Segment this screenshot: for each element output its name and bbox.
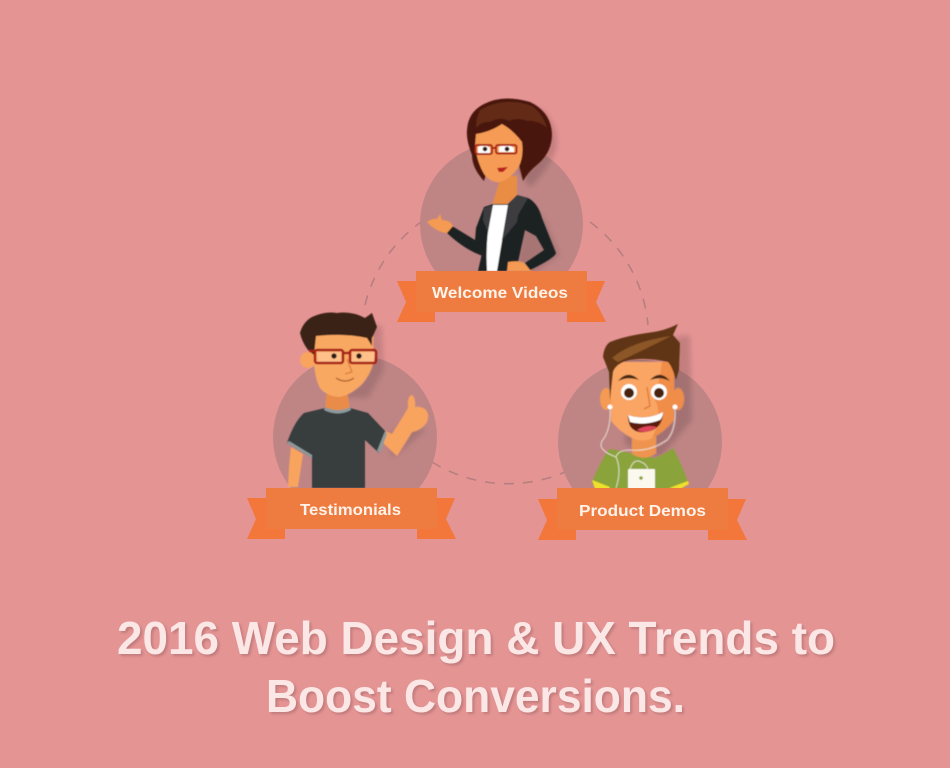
title bbox=[117, 612, 837, 724]
woman figure bbox=[427, 98, 560, 272]
label: Welcome Videos: Welcome Videos bbox=[432, 285, 568, 302]
backdrop circle: glasses man bbox=[273, 355, 437, 519]
ribbon: Product Demos bbox=[538, 488, 747, 540]
label: Testimonials: Testimonials bbox=[300, 502, 401, 519]
character: woman with ribbon bbox=[397, 98, 606, 322]
glasses man figure bbox=[287, 312, 428, 488]
character: man with glasses and ribbon bbox=[247, 312, 456, 539]
dashed connector arcs bbox=[365, 222, 648, 484]
ribbon: Testimonials bbox=[247, 488, 456, 539]
ribbon: Welcome Videos bbox=[397, 271, 606, 322]
title: 2016 Web Design & UX Trends to bbox=[119, 614, 837, 666]
earphones man figure bbox=[592, 324, 692, 489]
title: Boost Conversions. bbox=[266, 670, 685, 722]
character: man with earphones and ribbon bbox=[538, 324, 747, 540]
label: Product Demos: Product Demos bbox=[579, 503, 706, 520]
backdrop circle: earphones man bbox=[558, 360, 722, 524]
title: 2016 Web Design & UX Trends to bbox=[117, 612, 835, 664]
title: Boost Conversions. bbox=[268, 672, 687, 724]
backdrop circle: woman bbox=[420, 142, 583, 306]
